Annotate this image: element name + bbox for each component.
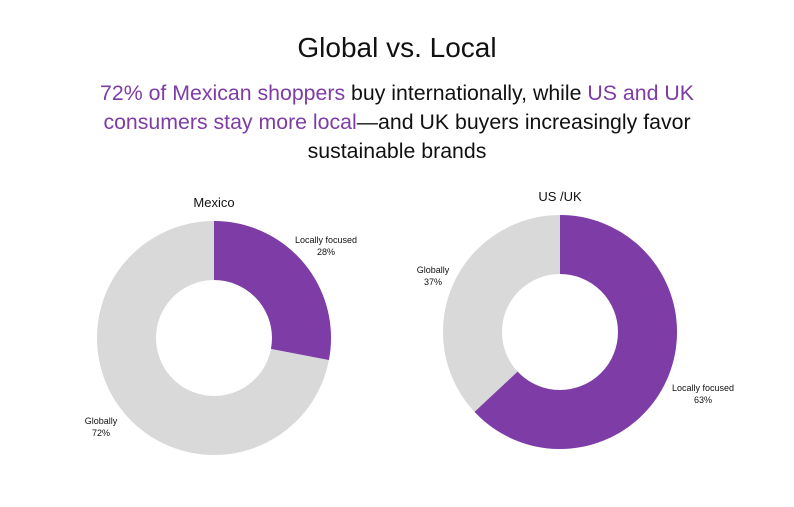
label: locally focused 28%	[295, 235, 357, 257]
heading: US/UK: US /UK	[538, 189, 582, 204]
label: globally 37%	[417, 265, 450, 287]
label: locally focused 28%: 28%	[317, 247, 335, 257]
label: globally 72%	[85, 416, 118, 438]
donut: US/UK	[443, 215, 677, 449]
chart: US/UK	[417, 189, 734, 449]
subtitle: consumers stay more local—and UK buyers increasingly favor	[103, 110, 691, 134]
label: globally 72%: Globally	[85, 416, 117, 426]
label: globally 37%: Globally	[417, 265, 449, 275]
label: globally 72%: 72%	[92, 428, 110, 438]
label: locally focused 63%	[672, 383, 734, 405]
label: locally focused 63%: Locally focused	[672, 383, 734, 393]
title: Global vs. Local	[297, 32, 497, 63]
label: globally 37%: 37%	[424, 277, 442, 287]
chart: Mexico	[85, 195, 357, 455]
label: locally focused 63%: 63%	[694, 395, 712, 405]
subtitle: sustainable brands	[308, 139, 486, 163]
subtitle: 72% of Mexican shoppers buy internationally, while US and UK	[100, 81, 694, 105]
heading: Mexico: Mexico	[193, 195, 235, 210]
subtitle	[100, 81, 694, 163]
label: locally focused 28%: Locally focused	[295, 235, 357, 245]
donut: Mexico	[97, 221, 331, 455]
